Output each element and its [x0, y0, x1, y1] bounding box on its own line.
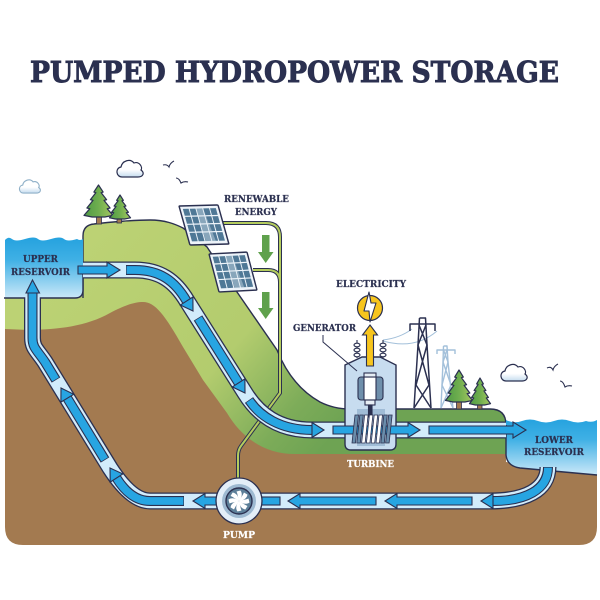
title: PUMPED HYDROPOWER STORAGE: [30, 55, 559, 89]
cloud top: [117, 160, 143, 177]
hillside: green land: [5, 220, 506, 465]
generator unit: [358, 373, 383, 417]
pump label: PUMP: [223, 530, 255, 541]
trees by lower reservoir: [446, 370, 490, 409]
upper reservoir outline: [4, 270, 83, 298]
transmission tower light: [437, 346, 455, 408]
generator label: GENERATOR: [293, 323, 356, 334]
green arrow lower: [258, 292, 274, 319]
green arrow upper: [258, 235, 274, 263]
yellow electricity arrow: [362, 325, 378, 366]
upper pipe: [78, 262, 526, 438]
icon: electricity lightning bolt: [358, 292, 382, 322]
renewable energy label: RENEWABLE: [224, 194, 289, 205]
solar panel upper: [179, 205, 229, 245]
cloud right: [501, 364, 527, 381]
generator leader line: [323, 335, 357, 371]
lower reservoir label: LOWER: [535, 435, 573, 446]
hillside outline: [83, 220, 506, 425]
lower reservoir label: RESERVOIR: [524, 447, 584, 458]
underground: brown earth: [5, 302, 597, 545]
turbine chamber shading: [357, 409, 385, 446]
lower reservoir label: [524, 435, 584, 458]
upper reservoir label: UPPER: [23, 254, 58, 265]
power line wires: [383, 329, 437, 344]
upper reservoir label: RESERVOIR: [11, 267, 70, 278]
renewable energy label: [224, 194, 289, 218]
power cables from solar panels to pump: [222, 223, 280, 480]
upper reservoir water: [4, 238, 83, 298]
lower reservoir outline: [506, 425, 597, 475]
pump: [216, 478, 262, 524]
turbine and generator housing: [333, 357, 420, 450]
cloud left: [19, 180, 40, 193]
insulators: [354, 340, 386, 358]
renewable energy label: ENERGY: [235, 207, 277, 218]
turbine blades: [352, 415, 392, 443]
trees on hill: [84, 185, 130, 224]
turbine inlet blue flow: [333, 422, 420, 438]
lower reservoir water: [506, 420, 597, 475]
lower return pipe: [26, 280, 548, 508]
upper reservoir label: [11, 254, 70, 278]
transmission tower dark: [410, 318, 435, 408]
electricity label: ELECTRICITY: [336, 279, 406, 290]
solar panel lower: [209, 252, 257, 292]
birds: [163, 161, 572, 387]
turbine label: TURBINE: [347, 459, 394, 470]
